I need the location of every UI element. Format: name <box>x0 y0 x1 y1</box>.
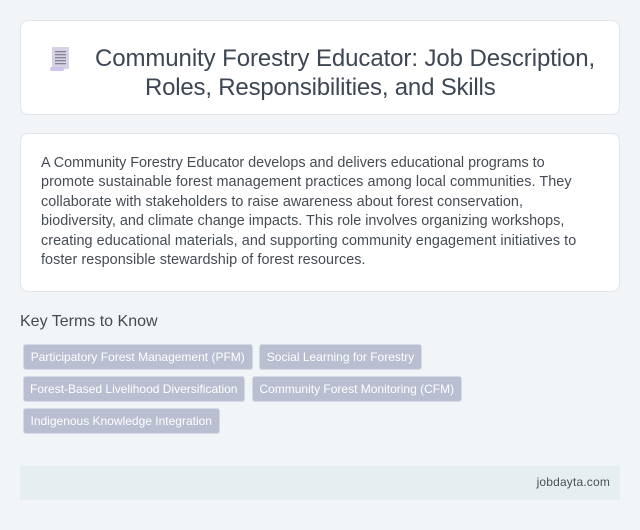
tag <box>252 376 462 402</box>
description text: collaborate with stakeholders to raise awareness about forest conservation, <box>41 194 523 210</box>
tag <box>23 376 244 402</box>
title: Community Forestry Educator: Job Description, <box>95 45 595 72</box>
icon: scroll document <box>50 47 69 71</box>
heading: key terms: Key Terms to Know <box>20 313 158 330</box>
description text: foster responsible stewardship of forest resources. <box>41 252 366 268</box>
panel: header <box>20 20 620 115</box>
tag: Forest-Based Livelihood Diversification <box>30 382 237 396</box>
tag <box>259 344 422 370</box>
tag: Community Forest Monitoring (CFM) <box>259 382 454 396</box>
tag <box>23 344 252 370</box>
tag: Social Learning for Forestry <box>267 350 414 364</box>
footer source text: jobdayta.com <box>537 475 610 489</box>
description text <box>41 155 576 268</box>
panel: key term tags <box>23 344 462 434</box>
panel: description <box>20 133 620 292</box>
description text: promote sustainable forest management practices among local communities. They <box>41 174 572 190</box>
description text: biodiversity, and climate change impacts. This role involves organizing workshops, <box>41 213 564 229</box>
description text: A Community Forestry Educator develops and delivers educational programs to <box>41 155 545 171</box>
title: Roles, Responsibilities, and Skills <box>145 74 496 101</box>
description text: creating educational materials, and supporting community engagement initiatives to <box>41 233 576 249</box>
tag: Participatory Forest Management (PFM) <box>31 350 245 364</box>
tag: Indigenous Knowledge Integration <box>30 414 212 428</box>
tag <box>23 408 220 434</box>
title <box>95 45 595 101</box>
footer bar <box>20 466 620 500</box>
